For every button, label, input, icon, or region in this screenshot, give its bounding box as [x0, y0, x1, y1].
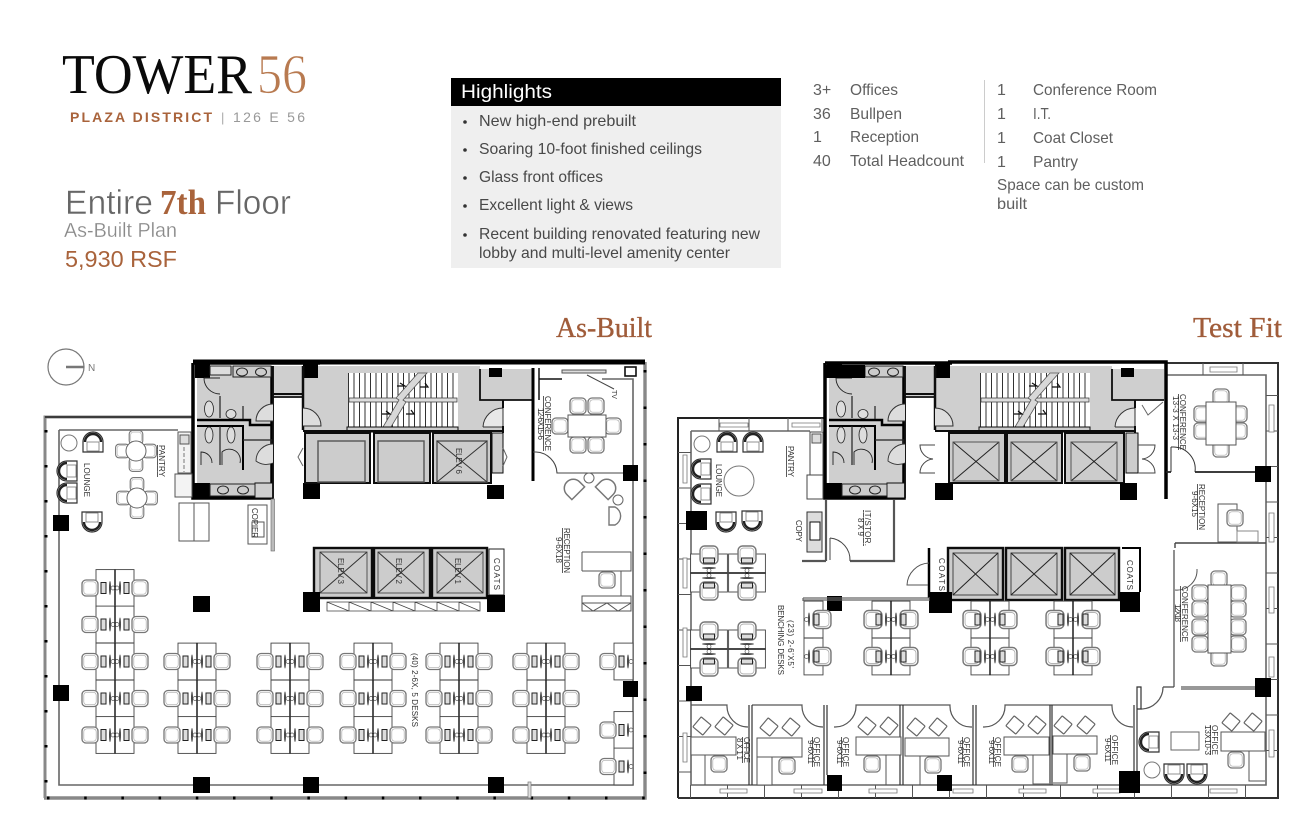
- pantry, copier and IT room: [786, 432, 894, 561]
- heading: as-built: As-Built: [556, 313, 652, 344]
- upper elevator bank: [298, 433, 507, 499]
- bench block 3: [804, 601, 831, 675]
- bench block 5: [963, 601, 1017, 675]
- pantry and copier: COPIER: [250, 508, 259, 538]
- program list: rooms: 1: [997, 154, 1006, 171]
- bullet list: [463, 113, 760, 262]
- bench block 6: [1046, 601, 1100, 675]
- core: restrooms and stairs: [825, 363, 1164, 499]
- program list: headcount: Reception: [850, 129, 919, 146]
- program list: headcount: 36: [813, 106, 831, 123]
- logo number: 56: [257, 44, 307, 106]
- coats labels: COATS: [937, 558, 946, 591]
- logo address: 126 E 56: [233, 109, 305, 125]
- conference room 2: CONFERENCE: [1180, 586, 1189, 642]
- core: restrooms and stairs: [193, 363, 532, 499]
- office 2: OFFICE: [812, 737, 821, 767]
- office 6: OFFICE: [1110, 735, 1119, 765]
- office 2: [757, 718, 821, 785]
- conference room 2: 12X18: [1173, 604, 1182, 623]
- office 1: 8X11: [735, 738, 744, 761]
- program list: rooms: built: [997, 196, 1028, 213]
- logo wordmark: TOWER: [62, 44, 253, 106]
- coats labels: COATS: [1125, 560, 1134, 590]
- conference room: CONFERENCE: [543, 396, 552, 451]
- pantry and copier: [157, 432, 274, 551]
- office 3: OFFICE: [841, 737, 850, 767]
- lower elevator bank: ELEV 3: [336, 558, 345, 585]
- bench block 4: [864, 601, 918, 675]
- upper elevator bank: [920, 433, 1155, 500]
- bullet list: Glass front offices: [479, 169, 603, 186]
- reception: 9-6X15: [1190, 491, 1199, 518]
- program list: rooms: I.T.: [1033, 106, 1051, 123]
- conference room: 12-6X15-6: [536, 408, 545, 441]
- reception: [554, 473, 631, 611]
- pantry, copier and IT room: COPY: [794, 520, 803, 543]
- floor plan: as-built: [44, 362, 645, 798]
- office 4: [905, 718, 971, 785]
- lounge: [691, 432, 763, 532]
- floor title: Entire: [65, 184, 153, 222]
- conference room 1: [1142, 389, 1255, 472]
- office 5: OFFICE: [993, 737, 1002, 767]
- desk block 6: [513, 643, 579, 753]
- lower elevator bank: ELEV 2: [394, 558, 403, 585]
- lounge: LOUNGE: [82, 463, 91, 497]
- office 6: [1053, 716, 1119, 783]
- logo: [62, 44, 307, 125]
- desk count label: (40) 2-6X, 5 DESKS: [410, 653, 419, 727]
- program list: rooms: 1: [997, 106, 1006, 123]
- icon: north compass: [48, 349, 95, 385]
- office 7: [1139, 713, 1265, 784]
- perimeter walls and windows: [678, 363, 1278, 798]
- reception: RECEPTION: [1197, 484, 1206, 530]
- program list: rooms: Coat Closet: [1033, 130, 1114, 147]
- lounge: [57, 431, 157, 532]
- floor title end: Floor: [215, 184, 291, 222]
- bullet list: lobby and multi-level amenity center: [479, 245, 731, 262]
- office 7: OFFICE: [1210, 725, 1219, 755]
- benching desks: (23) 2-6'X5': [786, 620, 795, 668]
- bullet list: Recent building renovated featuring new: [479, 226, 760, 243]
- program list: headcount: 3+: [813, 82, 831, 99]
- logo divider: |: [221, 110, 224, 125]
- highlights header bar: [451, 78, 781, 106]
- program list: headcount: Offices: [850, 82, 898, 99]
- desk block 7: [600, 643, 633, 785]
- lower elevator bank: ELEV 1: [453, 558, 462, 585]
- coats labels: [937, 558, 1134, 591]
- floor number: 7th: [160, 183, 206, 222]
- desk block 1: [82, 570, 148, 753]
- bullet list: Excellent light & views: [479, 197, 633, 214]
- office 1: [691, 717, 751, 785]
- conference room 2: [1163, 550, 1255, 689]
- heading: test fit: Test Fit: [1193, 313, 1282, 344]
- bench block 1: [691, 546, 765, 600]
- office 1: OFFICE: [742, 737, 751, 763]
- lounge: LOUNGE: [714, 464, 723, 497]
- structural columns: [53, 465, 638, 793]
- lower elevator bank: COATS: [492, 558, 501, 590]
- conference room 1: CONFERENCE: [1178, 394, 1187, 450]
- bullet list: New high-end prebuilt: [479, 113, 637, 130]
- office 3: [835, 717, 901, 785]
- floor title block: [64, 183, 291, 272]
- office walls: [691, 687, 1163, 785]
- program list: rooms: Conference Room: [1033, 82, 1157, 99]
- rentable area: 5,930 RSF: [65, 246, 177, 272]
- program list: headcount: Bullpen: [850, 106, 902, 123]
- conference room 1: 13-3 X 13-3: [1171, 396, 1180, 441]
- office 4: 9-6X11: [956, 740, 965, 765]
- lower elevator bank: [303, 548, 505, 612]
- reception: 9-6X18: [554, 537, 563, 564]
- desk block 4: [340, 643, 406, 753]
- bullet list: Soaring 10-foot finished ceilings: [479, 141, 702, 158]
- office 5: [987, 716, 1049, 784]
- icon: north compass: N: [88, 363, 95, 374]
- program list: headcount: Total Headcount: [850, 153, 965, 170]
- program list: headcount: 1: [813, 129, 822, 146]
- pantry and copier: PANTRY: [157, 445, 166, 478]
- program list: headcount: 40: [813, 153, 831, 170]
- benching desks: BENCHING DESKS: [776, 605, 785, 675]
- storage strip: [327, 602, 480, 611]
- reception: [1175, 484, 1266, 548]
- perimeter walls: [44, 362, 645, 798]
- office 2: 9-6X11: [806, 740, 815, 765]
- pantry, copier and IT room: IT/STOR.: [863, 510, 872, 546]
- workstations: 40 desks: [82, 570, 633, 785]
- plan subtitle: As-Built Plan: [64, 220, 177, 242]
- floor plan: test fit: [678, 362, 1278, 798]
- lower elevator bank: [907, 548, 1140, 600]
- upper elevator bank: ELEV 6: [454, 448, 463, 475]
- bench block 2: [691, 622, 765, 676]
- program list: headcount: [813, 82, 965, 170]
- program list: rooms: 1: [997, 82, 1006, 99]
- office 6: 9-6X11: [1103, 738, 1112, 763]
- program list: rooms: Pantry: [1033, 154, 1078, 171]
- pantry, copier and IT room: 8X9: [856, 518, 865, 537]
- office 3: 9-6X11: [835, 740, 844, 765]
- highlights heading: Highlights: [461, 82, 552, 103]
- structural columns: [686, 466, 1271, 793]
- conference room: [533, 367, 636, 481]
- logo tagline: PLAZA DISTRICT: [70, 109, 212, 125]
- program list: rooms: Space can be custom: [997, 177, 1144, 194]
- desk block 2: [164, 643, 230, 753]
- office 7: 13X10-3: [1203, 725, 1212, 756]
- partition wall: [803, 598, 930, 601]
- tv label: TV: [610, 390, 617, 399]
- program list: rooms: 1: [997, 130, 1006, 147]
- panel: highlights: [451, 78, 781, 268]
- desk block 3: [257, 643, 323, 753]
- pantry, copier and IT room: PANTRY: [786, 446, 795, 478]
- benching desks: [691, 546, 1100, 676]
- program list: rooms: [997, 82, 1157, 213]
- reception: RECEPTION: [562, 528, 571, 573]
- office 5: 9-6X11: [987, 740, 996, 765]
- desk block 5: [426, 643, 492, 753]
- office 4: OFFICE: [962, 737, 971, 767]
